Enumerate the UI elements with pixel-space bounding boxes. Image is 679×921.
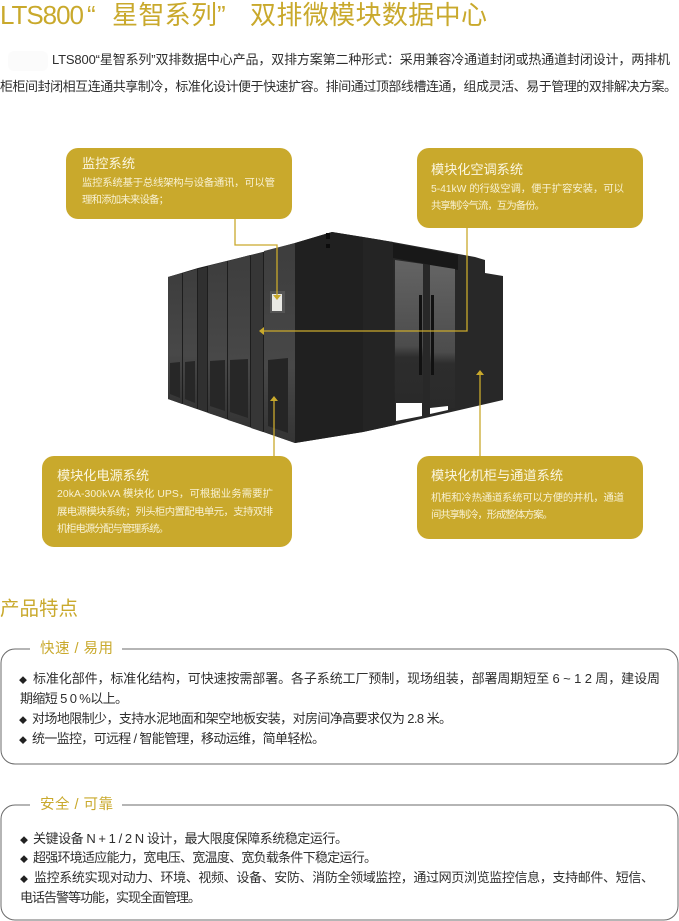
left side of enclosure <box>168 243 295 443</box>
callout: modular power: 展电源模块系统；列头柜内置配电单元，支持双排 <box>57 505 273 518</box>
feature list: 标准化部件，标准化结构，可快速按需部署。各子系统工厂预制，现场组装，部署周期短至 6 ~ 1 2 周，建设周 <box>33 671 660 686</box>
section heading: 产品特点 <box>0 598 78 620</box>
feature list: ◆ <box>19 676 27 685</box>
callout: monitoring system <box>66 148 292 219</box>
feature list: 对场地限制少，支持水泥地面和架空地板安装，对房间净高要求仅为 2.8 米。 <box>32 711 452 726</box>
intro paragraph <box>0 51 677 94</box>
connector: air conditioning <box>259 228 467 335</box>
data centre cabinet illustration <box>168 232 503 443</box>
callout: modular air conditioning: 共享制冷气流，互为备份。 <box>431 199 545 212</box>
callout: modular cabinet and aisle: 间共享制冷，形成整体方案。 <box>431 508 553 521</box>
callout: modular air conditioning <box>417 148 643 228</box>
feature list <box>20 831 654 905</box>
callout: monitoring system: 监控系统基于总线架构与设备通讯，可以管 <box>82 176 275 189</box>
title: 双排微模块数据中心 <box>250 0 487 30</box>
callout: modular power: 机柜电源分配与管理系统。 <box>57 522 169 535</box>
title: “ <box>87 0 96 30</box>
glass doors <box>393 243 458 421</box>
callout: monitoring system: 理和添加未来设备； <box>82 193 169 206</box>
callout: modular power <box>42 456 292 547</box>
intro paragraph: 柜柜间封闭相互连通共享制冷，标准化设计便于快速扩容。排间通过顶部线槽连通，组成灵活、易于管理的双排解决方案。 <box>0 79 677 94</box>
feature list: 期缩短 5 0 %以上。 <box>20 691 128 706</box>
callout: modular cabinet and aisle <box>417 456 643 539</box>
front side of enclosure <box>295 232 503 443</box>
connector: monitoring system <box>235 219 281 300</box>
connector: power <box>270 396 278 456</box>
title <box>0 0 487 30</box>
feature list: 关键设备 N + 1 / 2 N 设计，最大限度保障系统稳定运行。 <box>33 831 348 846</box>
feature list: ◆ <box>19 736 27 745</box>
feature list: ◆ <box>20 855 28 864</box>
intro paragraph: LTS800“星智系列”双排数据中心产品，双排方案第二种形式：采用兼容冷通道封闭或热通道封闭设计，两排机 <box>52 52 670 67</box>
feature list: 监控系统实现对动力、环境、视频、设备、安防、消防全领域监控，通过网页浏览监控信息，支持邮件、短信、 <box>34 870 654 885</box>
panel: safe and reliable <box>1 795 678 920</box>
feature list: 超强环境适应能力，宽电压、宽温度、宽负载条件下稳定运行。 <box>33 850 377 865</box>
feature list: ◆ <box>20 836 28 845</box>
connector: cabinet and aisle <box>476 370 484 456</box>
title: 星智系列 <box>112 0 217 30</box>
panel label: 快速 / 易用 <box>40 640 113 657</box>
callout: modular cabinet and aisle: 机柜和冷热通道系统可以方便的并机，通道 <box>431 491 624 504</box>
callout: modular cabinet and aisle: 模块化机柜与通道系统 <box>431 468 563 483</box>
panel label: 安全 / 可靠 <box>40 795 113 813</box>
callout: modular air conditioning: 模块化空调系统 <box>431 162 523 177</box>
touch screen <box>270 291 285 313</box>
feature list <box>19 671 660 746</box>
feature list: 统一监控，可远程 / 智能管理，移动运维，简单轻松。 <box>32 731 325 746</box>
title: ” <box>217 0 226 30</box>
panel: fast and easy <box>1 640 678 764</box>
callout: modular power: 模块化电源系统 <box>57 468 149 483</box>
callout: monitoring system: 监控系统 <box>82 156 135 171</box>
callout: modular power: 20kA-300kVA 模块化 UPS，可根据业务需要扩 <box>57 487 273 500</box>
feature list: 电话告警等功能，实现全面管理。 <box>20 890 201 905</box>
callout: modular air conditioning: 5-41kW 的行级空调，便于扩容安装，可以 <box>431 182 625 195</box>
feature list: ◆ <box>20 875 28 884</box>
title: LTS800 <box>0 0 84 30</box>
feature list: ◆ <box>19 716 27 725</box>
